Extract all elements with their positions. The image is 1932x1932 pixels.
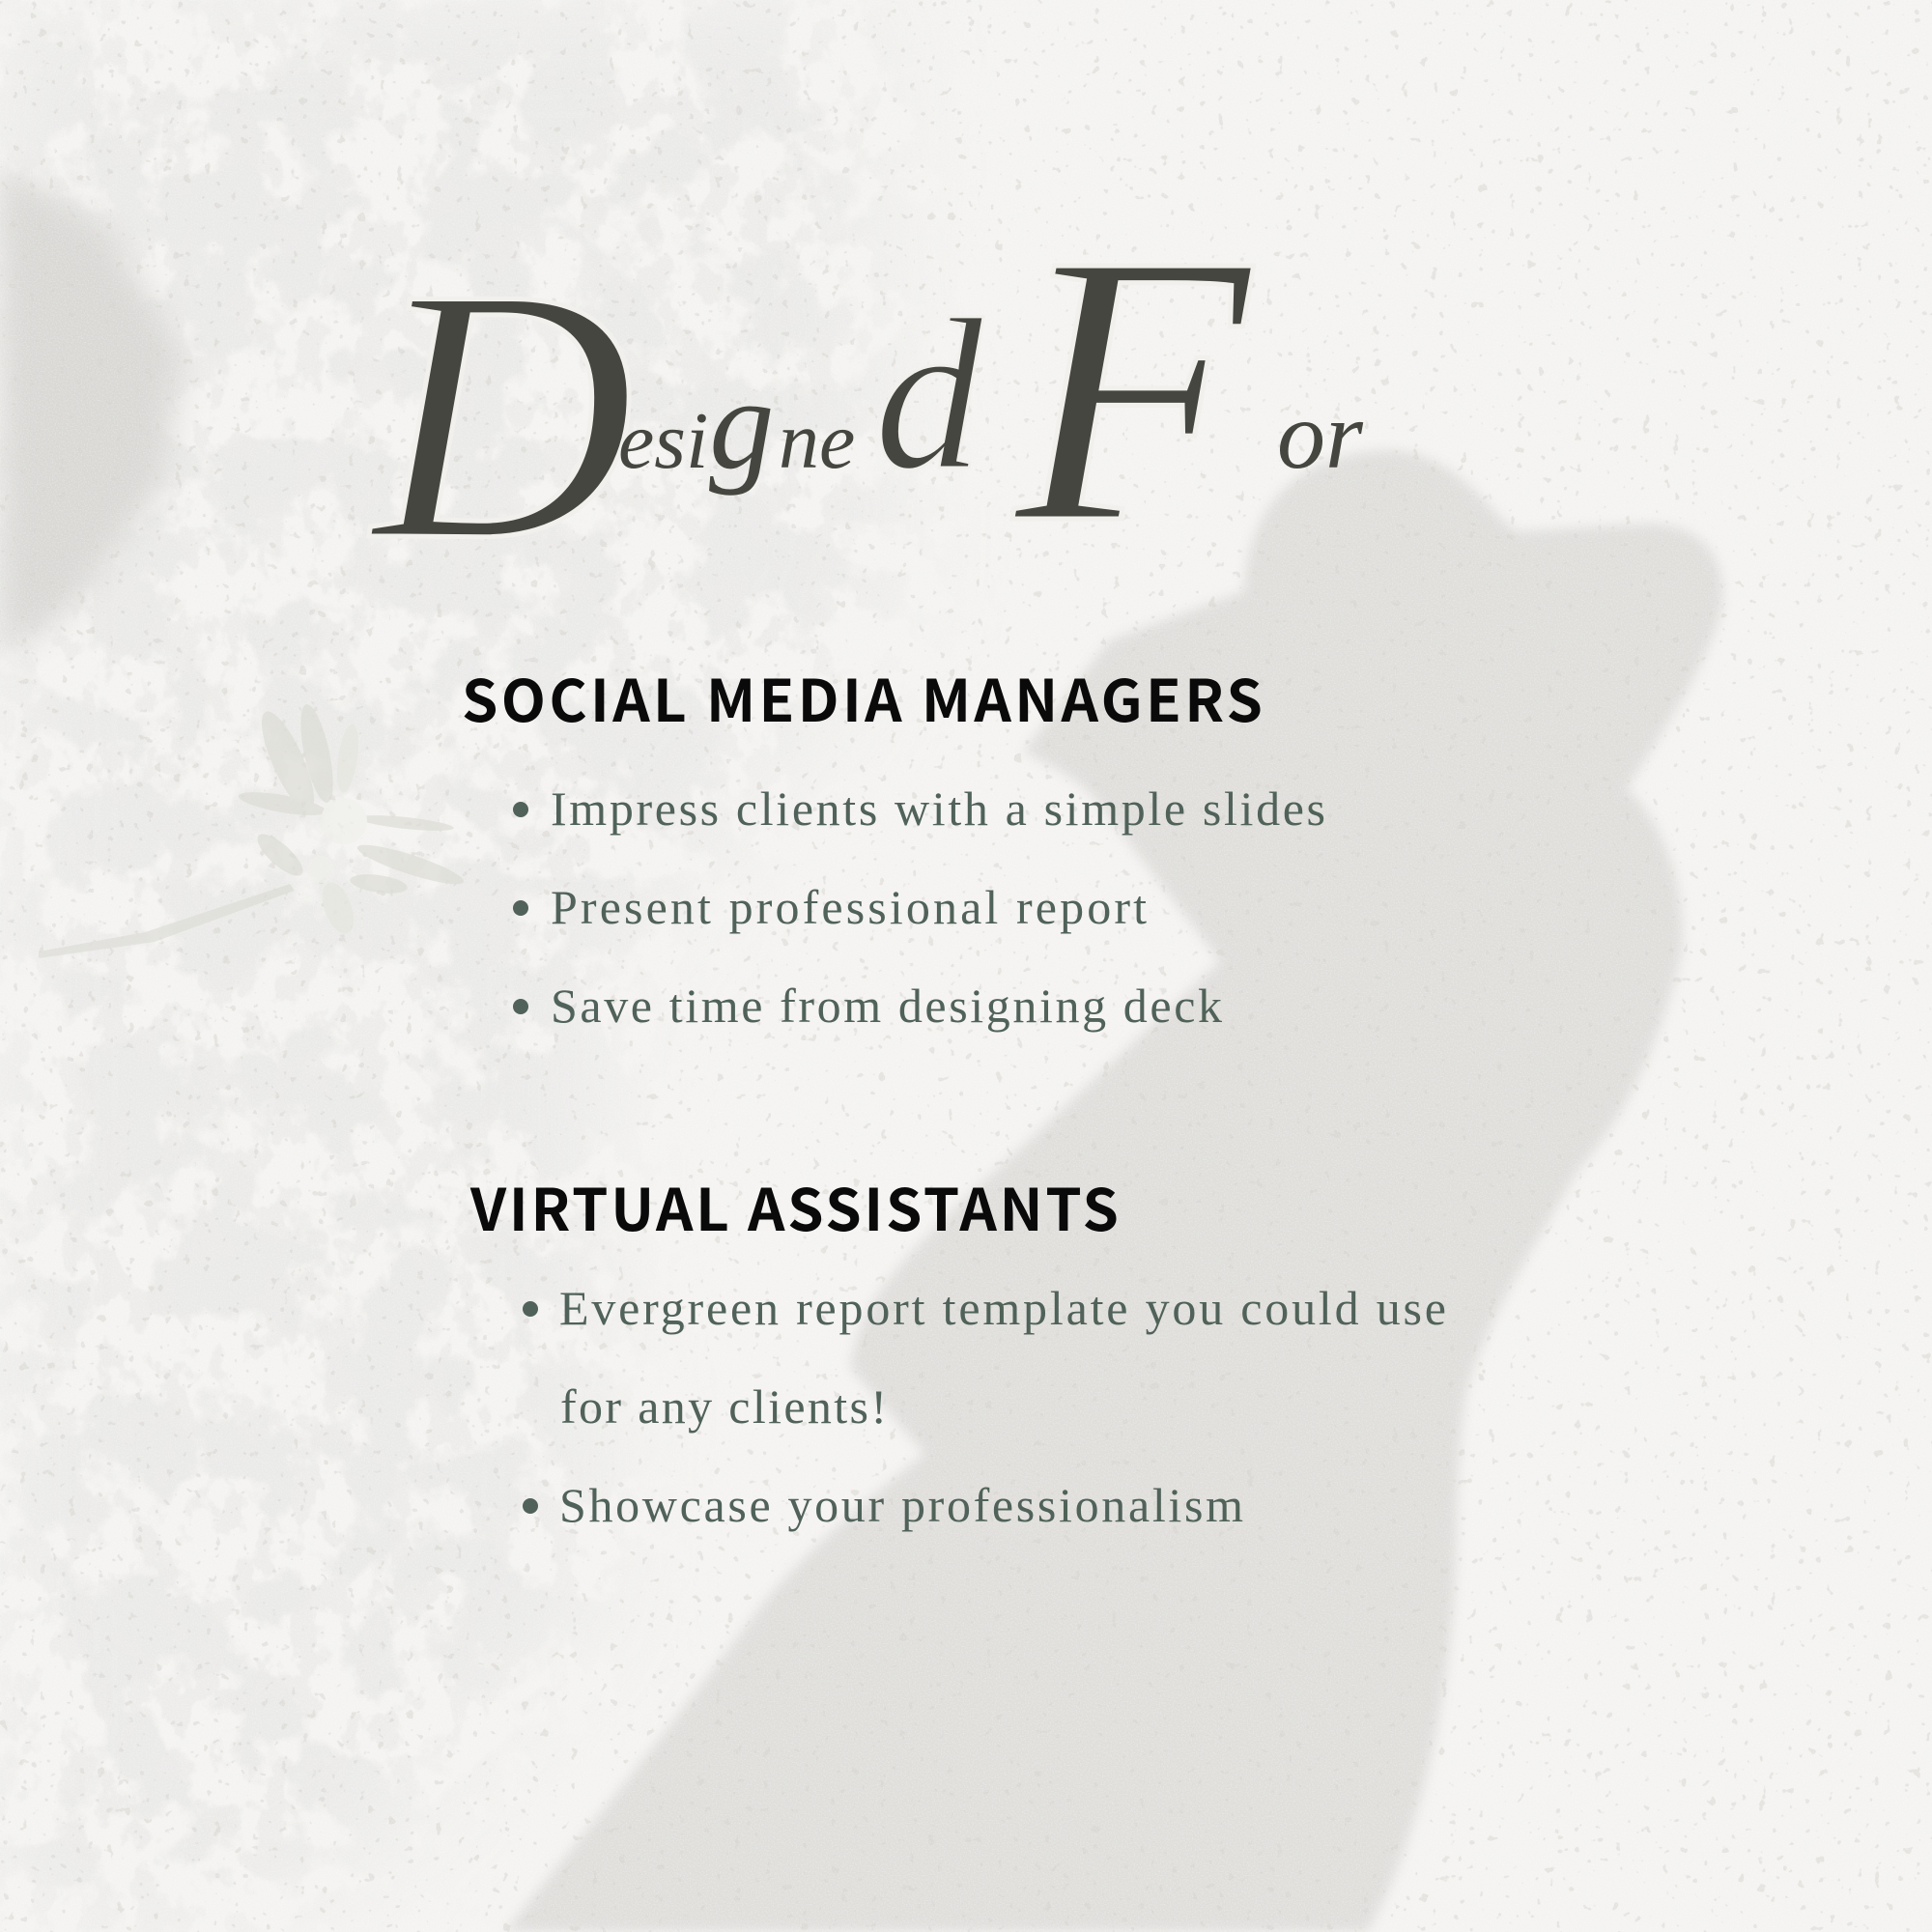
title: D [367,214,635,615]
title: ne [779,396,855,486]
list item 4 [523,1281,1446,1434]
list item 5: Showcase your professionalism [559,1478,1243,1532]
list item 4: Evergreen report template you could use [559,1281,1446,1335]
title: F [1009,175,1256,603]
foliage shadow [28,29,856,1880]
title: g [709,353,775,497]
heading: virtual assistants: VIRTUAL ASSISTANTS [469,1164,1119,1248]
title [367,175,1364,615]
list item 3: Save time from designing deck [551,979,1222,1033]
heading: social media managers: SOCIAL MEDIA MANAGERS [462,655,1263,739]
title: or [1277,382,1364,489]
section: social media managers [462,655,1325,1033]
list item 2: Present professional report [551,880,1147,934]
list item 1: Impress clients with a simple slides [551,781,1325,836]
top-left dark shadow [0,164,184,657]
title: esi [618,396,708,486]
title: d [874,273,984,515]
olive sprig [39,701,467,958]
list item 4: for any clients! [560,1379,887,1434]
section: virtual assistants [469,1164,1446,1532]
person silhouette shadow [505,450,1722,1932]
